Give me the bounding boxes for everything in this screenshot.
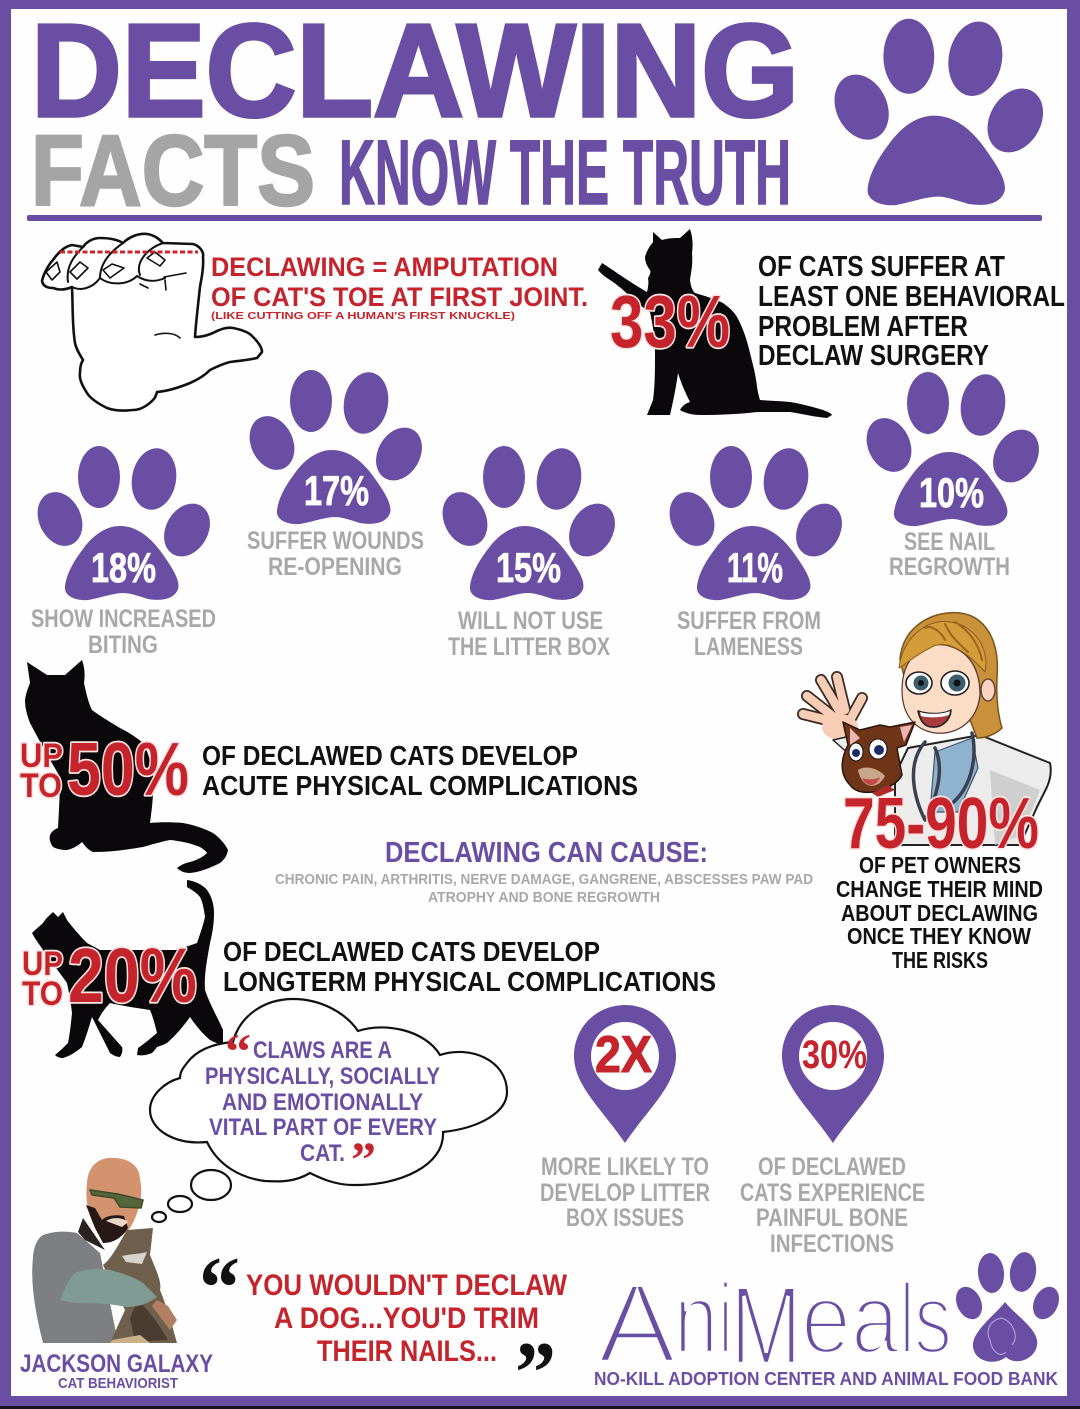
- Jackson quote: A DOG...YOU'D TRIM: [274, 1302, 539, 1335]
- stat paw: 18%: BITING: [88, 631, 158, 659]
- Jackson quote: YOU WOULDN'T DECLAW: [246, 1269, 568, 1302]
- causes list: ATROPHY AND BONE REGROWTH: [428, 890, 660, 906]
- shirt: [32, 1232, 118, 1343]
- Jackson Galaxy caption: [20, 1350, 213, 1392]
- vet eyes: [906, 672, 932, 694]
- stat paw: 15%: THE LITTER BOX: [448, 633, 610, 661]
- icon: black cat walking, up to 20%: TO: [22, 975, 63, 1013]
- brown cat: [842, 722, 915, 792]
- AniMeals logo wordmark: n: [674, 1263, 718, 1375]
- bone infection label: INFECTIONS: [770, 1230, 894, 1258]
- stat paw: 11%: SUFFER FROM: [677, 607, 821, 635]
- bone infection label: [740, 1153, 925, 1258]
- thought bubbles: [191, 1170, 231, 1200]
- stat paw: 11%: 11%: [727, 544, 783, 591]
- vet arm cuff: [833, 735, 870, 770]
- acute complications text: OF DECLAWED CATS DEVELOP: [202, 740, 578, 771]
- vet coat: [895, 735, 1051, 845]
- location pin: 2X: 2X: [595, 1026, 652, 1084]
- stat paw: 17%: [241, 369, 431, 581]
- vet face: [902, 645, 980, 733]
- litter box label: [540, 1153, 710, 1232]
- pet owners text: CHANGE THEIR MIND: [836, 876, 1043, 902]
- title: declawing: DECLAWING: [31, 0, 799, 144]
- icon: black cat walking, up to 20%: 20%: [68, 933, 197, 1019]
- litter box label: BOX ISSUES: [566, 1204, 684, 1232]
- pet owners text: ABOUT DECLAWING: [841, 900, 1038, 926]
- AniMeals logo wordmark: A: [598, 1261, 676, 1386]
- icon: sitting black cat with 33%: [598, 229, 832, 418]
- location pin: 30%: [782, 1005, 884, 1143]
- behavioral problem text: PROBLEM AFTER: [758, 311, 968, 343]
- vet illustration: [803, 613, 1051, 845]
- icon: black cat sitting with curled tail, up to 50%: 50%: [67, 727, 189, 811]
- vet hair back: [900, 613, 1002, 738]
- Jackson Galaxy caption: JACKSON GALAXY: [20, 1350, 213, 1378]
- stat paw: 11%: LAMENESS: [694, 633, 803, 661]
- icon: black cat sitting with curled tail, up to 50%: TO: [20, 767, 62, 805]
- pet owners text: THE RISKS: [892, 947, 988, 973]
- amputation text: (LIKE CUTTING OFF A HUMAN'S FIRST KNUCKLE): [211, 310, 515, 322]
- stat paw: 10%: REGROWTH: [889, 553, 1010, 581]
- stat paw: 17%: RE-OPENING: [268, 553, 402, 581]
- cat held: [103, 1228, 177, 1343]
- thought cloud: ”: [351, 1131, 376, 1187]
- longterm complications text: OF DECLAWED CATS DEVELOP: [223, 936, 600, 967]
- stat paw: 11%: [661, 445, 851, 661]
- AniMeals logo wordmark: i: [719, 1263, 732, 1375]
- vet waving hand: [803, 677, 862, 722]
- quote text: “: [225, 1023, 251, 1079]
- amputation text: DECLAWING = AMPUTATION: [211, 252, 558, 282]
- causes heading: DECLAWING CAN CAUSE:: [385, 837, 708, 869]
- bone infection label: CATS EXPERIENCE: [740, 1179, 925, 1207]
- thought cloud: CAT.: [300, 1140, 345, 1167]
- location pin: 2X: [574, 1005, 676, 1143]
- icon: large paw: [824, 17, 1054, 205]
- litter box label: MORE LIKELY TO: [541, 1153, 709, 1181]
- thought cloud: PHYSICALLY, SOCIALLY: [205, 1063, 440, 1090]
- pet owners text: ONCE THEY KNOW: [847, 923, 1031, 949]
- icon: black cat sitting with curled tail, up to 50%: [20, 660, 228, 873]
- amputation text: OF CAT'S TOE AT FIRST JOINT.: [211, 282, 588, 312]
- stat paw: 18%: [29, 445, 219, 659]
- acute complications text: [202, 740, 638, 801]
- tattooed arm: [60, 1269, 157, 1307]
- glasses: [90, 1190, 143, 1208]
- stat paw: 15%: 15%: [496, 544, 561, 591]
- thought cloud: CLAWS ARE A: [253, 1037, 392, 1064]
- behavioral problem text: DECLAW SURGERY: [758, 340, 989, 372]
- icon: sitting black cat with 33%: 33%: [610, 280, 730, 363]
- hand illustration: [42, 234, 262, 411]
- AniMeals logo wordmark: M: [730, 1263, 802, 1388]
- litter box label: DEVELOP LITTER: [540, 1179, 710, 1207]
- vet mouth: [918, 710, 951, 727]
- Jackson quote: THEIR NAILS...: [317, 1335, 497, 1368]
- AniMeals logo wordmark: [598, 1261, 952, 1388]
- bone infection label: PAINFUL BONE: [756, 1204, 908, 1232]
- AniMeals tagline: NO-KILL ADOPTION CENTER AND ANIMAL FOOD BANK: [594, 1369, 1058, 1389]
- AniMeals logo wordmark: s: [914, 1263, 952, 1375]
- stat paw: 17%: 17%: [304, 467, 369, 514]
- stat paw: 15%: WILL NOT USE: [458, 607, 603, 635]
- bone infection label: OF DECLAWED: [758, 1153, 906, 1181]
- pet owners text: [836, 852, 1043, 973]
- stat paw: 10%: [858, 371, 1048, 581]
- AniMeals logo wordmark: l: [900, 1263, 914, 1375]
- icon: black cat sitting with curled tail, up to 50%: UP: [20, 737, 63, 775]
- stat paw: 10%: 10%: [919, 469, 984, 516]
- behavioral problem text: [758, 251, 1065, 372]
- head: [86, 1158, 141, 1237]
- AniMeals logo wordmark: e: [801, 1263, 851, 1375]
- neck: [78, 1218, 105, 1250]
- stat paw: 10%: SEE NAIL: [904, 528, 995, 556]
- stat paw: 17%: SUFFER WOUNDS: [247, 527, 424, 555]
- stat paw: 15%: [434, 445, 624, 661]
- icon: black cat walking, up to 20%: [22, 880, 223, 1058]
- acute complications text: ACUTE PHYSICAL COMPLICATIONS: [202, 770, 638, 801]
- cut line on toes: [60, 250, 198, 254]
- beard: [86, 1205, 128, 1243]
- behavioral problem text: OF CATS SUFFER AT: [758, 251, 1005, 283]
- header divider: [27, 215, 1042, 221]
- AniMeals paw: [951, 1250, 1064, 1362]
- stat paw: 18%: 18%: [91, 544, 156, 591]
- Jackson quote: [199, 1240, 568, 1409]
- causes list: CHRONIC PAIN, ARTHRITIS, NERVE DAMAGE, GANGRENE, ABSCESSES PAW PAD: [275, 872, 813, 888]
- location pin: 30%: 30%: [802, 1033, 867, 1077]
- thought cloud: VITAL PART OF EVERY: [209, 1114, 437, 1141]
- stat paw: 18%: SHOW INCREASED: [31, 605, 216, 633]
- Jackson quote: “: [199, 1240, 240, 1337]
- causes list: [275, 872, 813, 906]
- title: facts: FACTS: [31, 115, 315, 227]
- thought cloud: AND EMOTIONALLY: [222, 1089, 423, 1116]
- amputation text: [211, 252, 588, 322]
- longterm complications text: [223, 936, 716, 997]
- thought cloud: [150, 999, 507, 1222]
- AniMeals logo wordmark: a: [851, 1263, 899, 1375]
- pet owners text: OF PET OWNERS: [859, 852, 1021, 878]
- icon: black cat walking, up to 20%: UP: [22, 945, 63, 983]
- longterm complications text: LONGTERM PHYSICAL COMPLICATIONS: [223, 966, 716, 997]
- Jackson Galaxy caption: CAT BEHAVIORIST: [58, 1375, 178, 1392]
- portrait: Jackson Galaxy with cat: [32, 1158, 177, 1343]
